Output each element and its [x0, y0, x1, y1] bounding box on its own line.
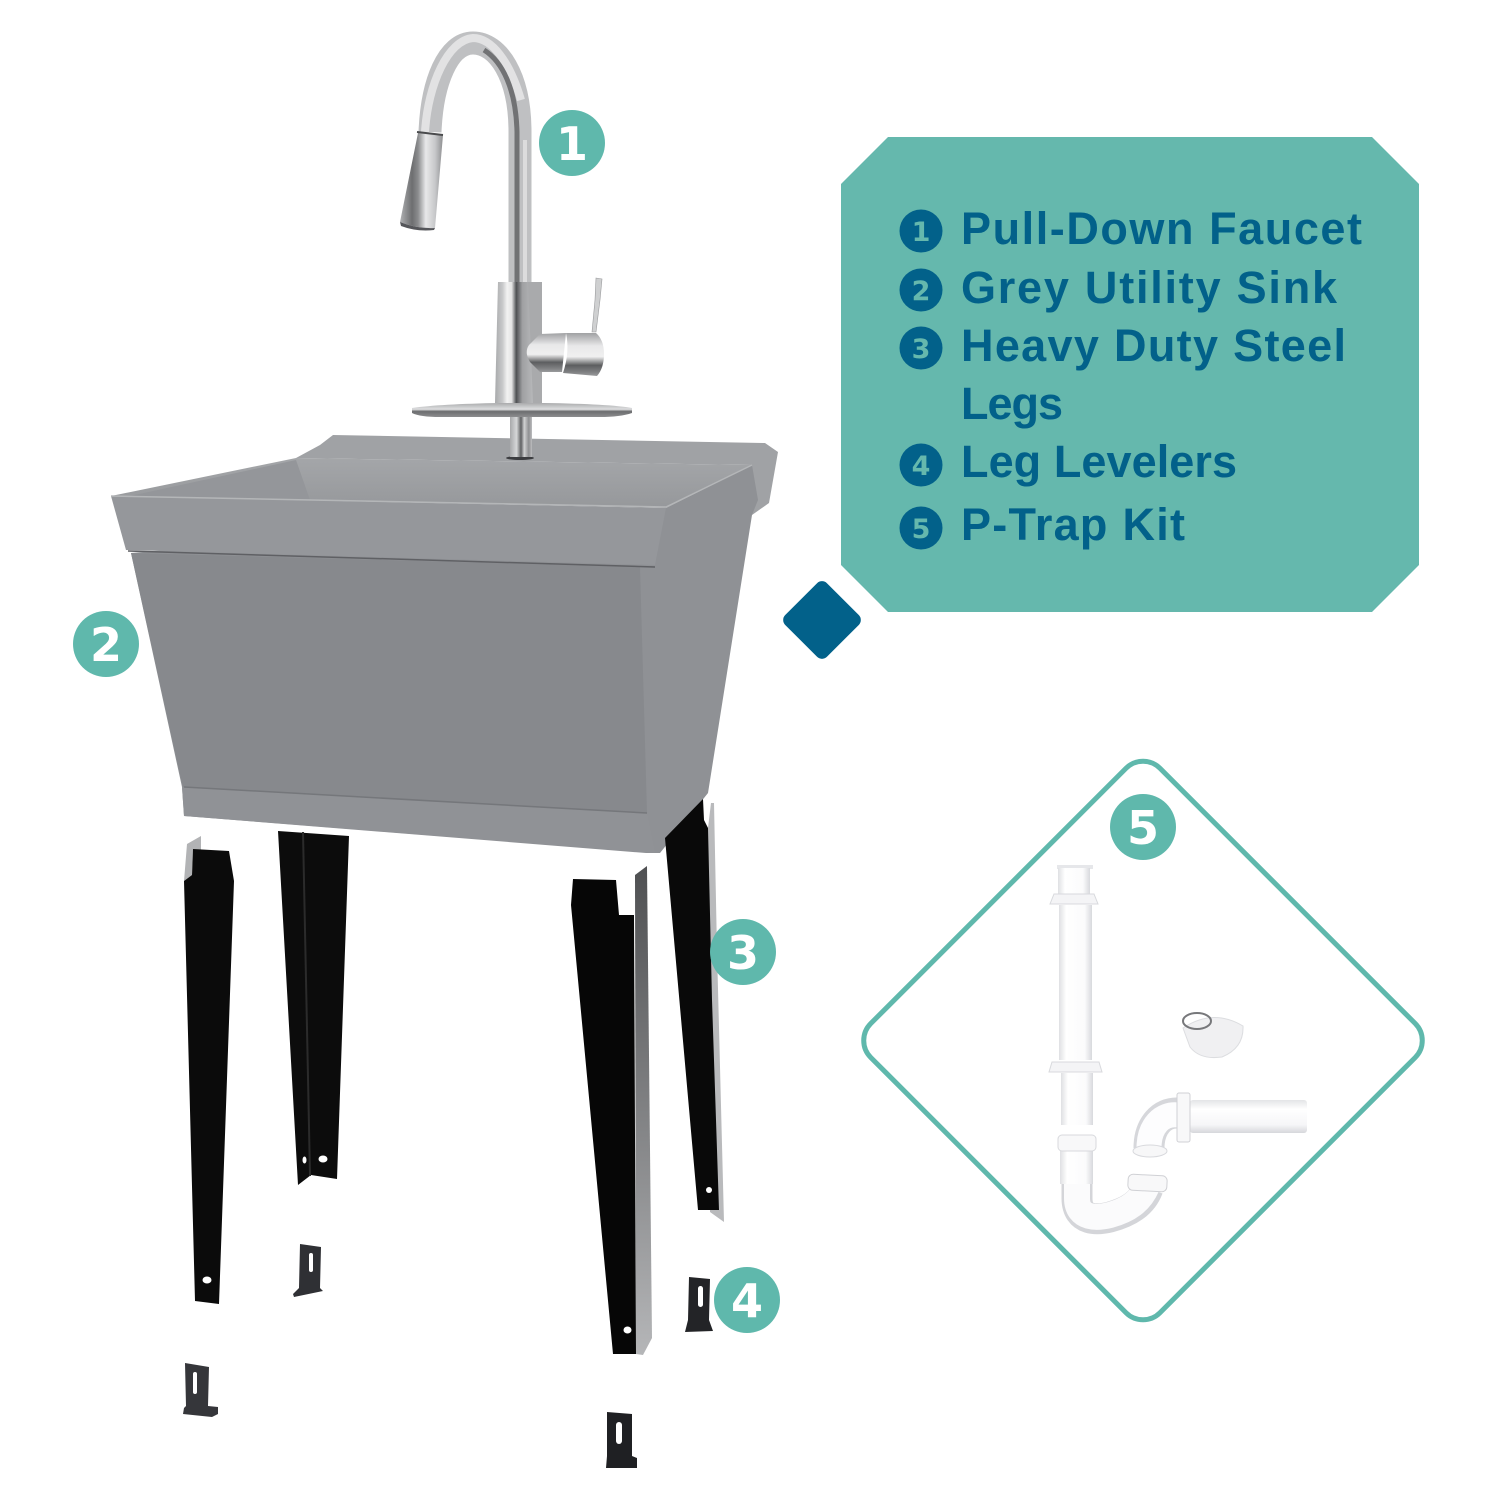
badge 3: 3	[727, 926, 759, 980]
deck plate	[412, 403, 632, 417]
badge 4	[714, 1267, 780, 1333]
mounting hole	[706, 1187, 712, 1193]
leveler foot A	[183, 1363, 218, 1417]
rim highlight	[111, 465, 752, 507]
tailpiece tube	[1049, 865, 1102, 1125]
band shadow line	[184, 787, 647, 813]
faucet gooseneck spout	[430, 43, 520, 284]
panel: parts list	[841, 137, 1419, 612]
blue diamond accent	[780, 578, 864, 662]
black leg	[571, 879, 636, 1354]
p-trap diamond frame	[854, 751, 1432, 1330]
mounting holes	[302, 1156, 306, 1164]
rubber stopper with ring	[1183, 1013, 1243, 1058]
leveler foot D	[606, 1412, 637, 1468]
leg ridge	[303, 832, 310, 1176]
leg: front right	[571, 866, 652, 1355]
silver flange	[635, 866, 652, 1355]
badge 2	[73, 611, 139, 677]
badge 1: 1	[556, 117, 588, 171]
panel background	[841, 137, 1419, 612]
badge 1	[539, 110, 605, 176]
list item 5: 5	[912, 514, 930, 545]
handle mixer body	[527, 333, 566, 372]
j-bend trap	[1058, 1135, 1167, 1219]
badge 2: 2	[90, 618, 122, 672]
mounting hole	[624, 1326, 632, 1334]
spray collar	[417, 132, 443, 135]
leg: back left	[278, 831, 349, 1185]
front rim	[111, 496, 666, 565]
badge 5: 5	[1127, 801, 1159, 855]
bottom band	[182, 787, 655, 853]
sink basin interior	[111, 458, 752, 508]
list item 3: 3	[912, 334, 930, 365]
list item 3	[900, 320, 1346, 429]
black leg	[184, 849, 234, 1304]
faucet base	[495, 282, 533, 403]
sink body front	[131, 553, 647, 813]
badge 4: 4	[731, 1274, 763, 1328]
lever handle	[592, 278, 602, 332]
elbow with drain arm	[1133, 1093, 1307, 1157]
silver tab	[184, 836, 201, 881]
mounting hole	[202, 1276, 212, 1284]
leveler foot B	[293, 1244, 323, 1297]
list item 3: Heavy Duty Steel	[961, 320, 1346, 371]
sink	[111, 435, 778, 853]
list item 1: Pull-Down Faucet	[961, 203, 1362, 254]
back ledge	[296, 435, 778, 515]
list item 2: Grey Utility Sink	[961, 262, 1338, 313]
badge 5	[1110, 794, 1176, 860]
list item 2: 2	[912, 276, 930, 307]
faucet stem below plate	[510, 415, 532, 457]
black leg	[665, 799, 719, 1210]
list item 4: 4	[912, 451, 930, 482]
spray head nozzle	[400, 222, 435, 230]
spout highlight	[425, 38, 521, 132]
sink body silhouette	[131, 465, 758, 853]
list item 5: P-Trap Kit	[961, 499, 1185, 550]
spout neck light stripe	[523, 140, 527, 284]
leveler foot C	[685, 1277, 713, 1332]
p-trap kit parts	[1049, 865, 1307, 1219]
faucet hole	[506, 456, 534, 460]
badge 3	[710, 919, 776, 985]
rim shadow line	[128, 551, 655, 567]
leg: front left	[184, 836, 234, 1304]
list item 3: Legs	[961, 378, 1063, 429]
list item 1: 1	[912, 217, 930, 248]
spout shading	[484, 50, 517, 284]
interior left wall	[130, 460, 310, 500]
leg: back right	[665, 799, 724, 1222]
silver edge	[708, 803, 724, 1222]
spray head	[400, 133, 443, 228]
faucet back column	[528, 282, 542, 407]
list item 4: Leg Levelers	[961, 436, 1237, 487]
faucet	[400, 38, 632, 457]
handle cap	[563, 333, 604, 376]
